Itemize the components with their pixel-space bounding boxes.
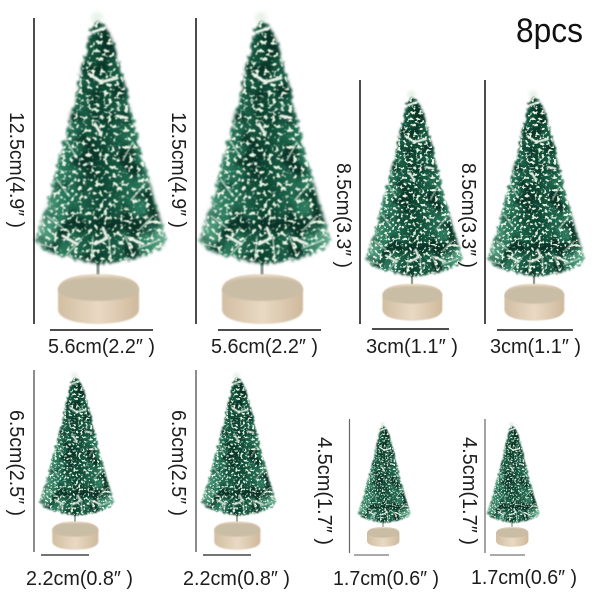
width label 3: 3cm(1.1″ ) xyxy=(366,336,458,358)
item 6: small tree xyxy=(167,370,290,590)
width label 6: 2.2cm(0.8″ ) xyxy=(183,568,290,590)
width line 2 xyxy=(218,329,321,331)
width label 7: 1.7cm(0.6″ ) xyxy=(333,568,439,590)
width line 5 xyxy=(41,554,89,556)
tree illustration 8 xyxy=(487,422,540,547)
width line 6 xyxy=(203,554,251,556)
width line 8 xyxy=(490,554,525,556)
width line 4 xyxy=(497,329,573,331)
item 5: small tree xyxy=(5,370,133,590)
item 7: mini tree xyxy=(313,419,439,590)
tree illustration 1 xyxy=(36,12,167,324)
item 1: large tree xyxy=(5,12,167,358)
height line 7 xyxy=(348,419,350,553)
title: 8pcs: 8pcs xyxy=(516,12,583,50)
tree illustration 5 xyxy=(40,372,114,550)
height label 8: 4.5cm(1.7″ ) xyxy=(458,437,480,545)
height label 7: 4.5cm(1.7″ ) xyxy=(313,437,335,545)
width label 8: 1.7cm(0.6″ ) xyxy=(471,567,577,589)
height label 3: 8.5cm(3.3″ ) xyxy=(332,163,354,268)
item 2: large tree xyxy=(167,12,331,358)
height label 2: 12.5cm(4.9″ ) xyxy=(167,112,189,228)
width label 1: 5.6cm(2.2″ ) xyxy=(48,336,155,358)
height label 1: 12.5cm(4.9″ ) xyxy=(5,112,27,228)
item 4: medium tree xyxy=(457,80,585,358)
height line 2 xyxy=(195,18,197,324)
width label 4: 3cm(1.1″ ) xyxy=(490,336,581,358)
width line 1 xyxy=(50,329,153,331)
height label 5: 6.5cm(2.5″ ) xyxy=(5,410,27,516)
tree illustration 7 xyxy=(358,422,411,547)
width line 7 xyxy=(354,554,389,556)
height line 3 xyxy=(359,80,361,324)
height line 5 xyxy=(33,370,35,552)
item 8: mini tree xyxy=(458,419,577,589)
item 3: medium tree xyxy=(332,80,463,358)
width label 5: 2.2cm(0.8″ ) xyxy=(26,568,133,590)
height line 1 xyxy=(33,18,35,324)
height label 6: 6.5cm(2.5″ ) xyxy=(167,410,189,516)
height label 4: 8.5cm(3.3″ ) xyxy=(457,163,479,268)
tree illustration 3 xyxy=(366,90,463,321)
height line 8 xyxy=(484,419,486,553)
width label 2: 5.6cm(2.2″ ) xyxy=(211,336,318,358)
tree illustration 2 xyxy=(200,12,331,324)
height line 6 xyxy=(195,370,197,552)
tree illustration 6 xyxy=(202,372,276,550)
height line 4 xyxy=(484,80,486,324)
width line 3 xyxy=(372,328,449,330)
tree illustration 4 xyxy=(488,90,585,321)
